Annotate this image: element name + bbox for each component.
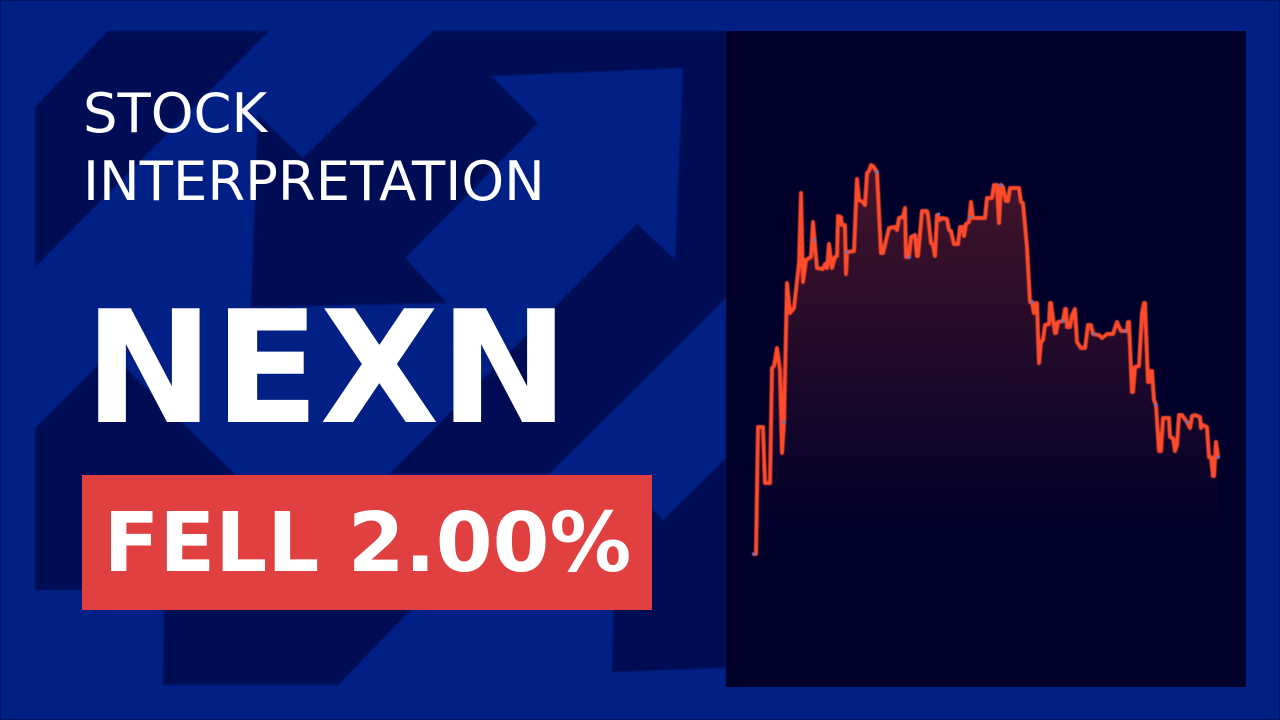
heading: stock interpretation bbox=[83, 82, 545, 213]
chart area fill bbox=[754, 165, 1218, 554]
arrow: top left bbox=[35, 31, 269, 267]
chart data markers bbox=[752, 170, 1220, 556]
chart background bbox=[726, 31, 1246, 687]
badge background bbox=[82, 475, 652, 610]
background arrows bbox=[35, 31, 726, 685]
arrow: lower centre bbox=[163, 600, 420, 685]
arrow: lower left bbox=[35, 353, 235, 590]
heading line 1: STOCK bbox=[83, 82, 269, 145]
heading line 2: INTERPRETATION bbox=[83, 150, 545, 213]
badge: percentage change bbox=[82, 475, 652, 610]
badge text: FELL 2.00% bbox=[104, 496, 631, 591]
chart price line bbox=[754, 165, 1218, 554]
ticker symbol: NEXN bbox=[84, 278, 569, 459]
arrow: lower right bbox=[612, 458, 726, 672]
panel: price chart bbox=[726, 31, 1246, 687]
arrow: large centre with cut-out arrow bbox=[251, 31, 726, 474]
